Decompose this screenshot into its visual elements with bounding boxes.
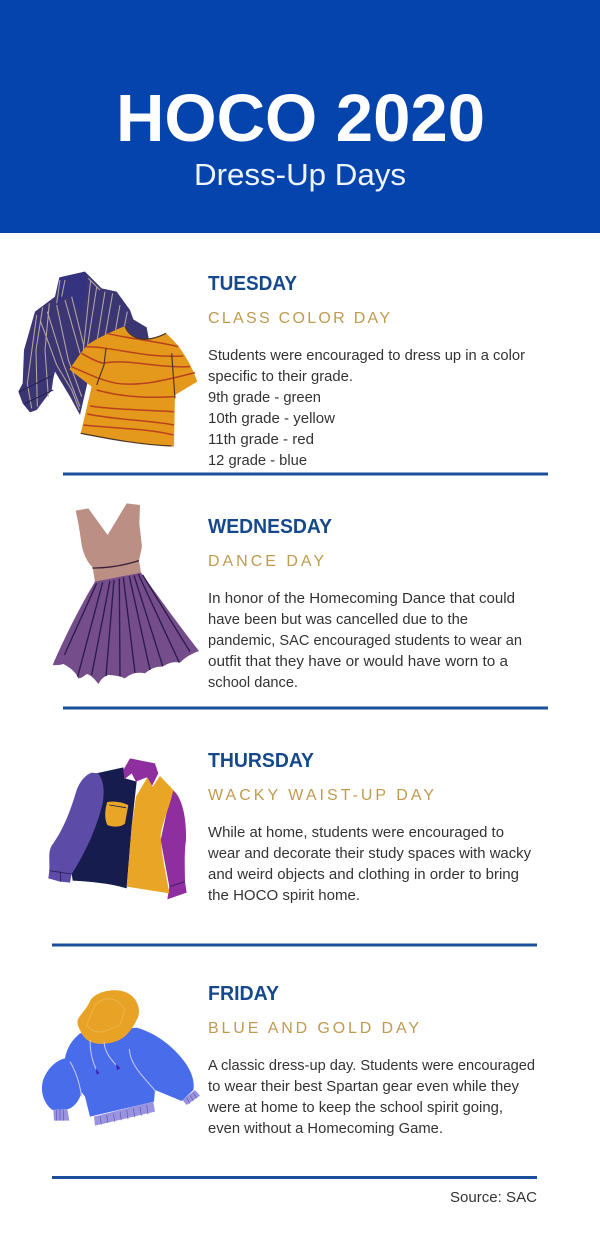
- text block: Tuesday description: [208, 347, 525, 469]
- text block: Thursday description: wear and decorate their study spaces with wacky: [207, 845, 531, 862]
- text block: Friday description: A classic dress-up day. Students were encouraged: [208, 1057, 535, 1074]
- text block: Tuesday description: 12 grade - blue: [208, 452, 307, 469]
- text block: Wednesday description: school dance.: [208, 674, 298, 691]
- subheading: Class Color Day: CLASS COLOR DAY: [208, 310, 390, 327]
- heading: Friday: FRIDAY: [208, 983, 280, 1005]
- text block: Thursday description: and weird objects and clothing in order to bring: [208, 866, 519, 883]
- text block: Friday description: [207, 1057, 535, 1137]
- title: HOCO 2020: [116, 81, 485, 156]
- heading: Wednesday: WEDNESDAY: [208, 516, 333, 538]
- subtitle: Dress-Up Days: [194, 157, 406, 192]
- text block: Thursday description: While at home, students were encouraged to: [208, 824, 504, 841]
- text block: Wednesday description: outfit that they have or would have worn to a: [208, 653, 509, 670]
- subheading: Wacky Waist-Up Day: WACKY WAIST-UP DAY: [208, 787, 434, 804]
- text block: Tuesday description: specific to their grade.: [208, 368, 353, 385]
- text block: Tuesday description: 9th grade - green: [208, 389, 321, 406]
- icon: striped shirts: [18, 272, 197, 447]
- text block: Wednesday description: In honor of the Homecoming Dance that could: [208, 590, 515, 607]
- text block: Tuesday description: 10th grade - yellow: [208, 410, 335, 427]
- header banner: [0, 0, 600, 233]
- text block: Friday description: were at home to keep the school spirit going,: [207, 1099, 503, 1116]
- text block: Friday description: even without a Homecoming Game.: [208, 1120, 443, 1137]
- text block: Tuesday description: 11th grade - red: [208, 431, 314, 448]
- text block: Wednesday description: [208, 590, 522, 691]
- text block: Wednesday description: pandemic, SAC encouraged students to wear an: [208, 632, 522, 649]
- panel: Tuesday: [18, 272, 525, 469]
- icon: blue hoodie: [42, 990, 200, 1126]
- subheading: Dance Day: DANCE DAY: [208, 553, 324, 570]
- heading: Thursday: THURSDAY: [208, 750, 315, 772]
- text block: Thursday description: the HOCO spirit home.: [208, 887, 360, 904]
- icon: dress: [53, 503, 199, 684]
- heading: Tuesday: TUESDAY: [208, 273, 298, 295]
- source note: Source: SAC: [450, 1189, 537, 1206]
- panel: Wednesday: [53, 503, 522, 691]
- text block: Thursday description: [207, 824, 531, 904]
- panel: Friday: [42, 983, 535, 1137]
- icon: colour-block jacket: [48, 758, 187, 899]
- subheading: Blue and Gold Day: BLUE AND GOLD DAY: [208, 1020, 419, 1037]
- panel: Thursday: [48, 750, 531, 904]
- text block: Wednesday description: have been but was cancelled due to the: [208, 611, 468, 628]
- text block: Friday description: to wear their best Spartan gear even while they: [208, 1078, 519, 1095]
- text block: Tuesday description: Students were encouraged to dress up in a color: [208, 347, 525, 364]
